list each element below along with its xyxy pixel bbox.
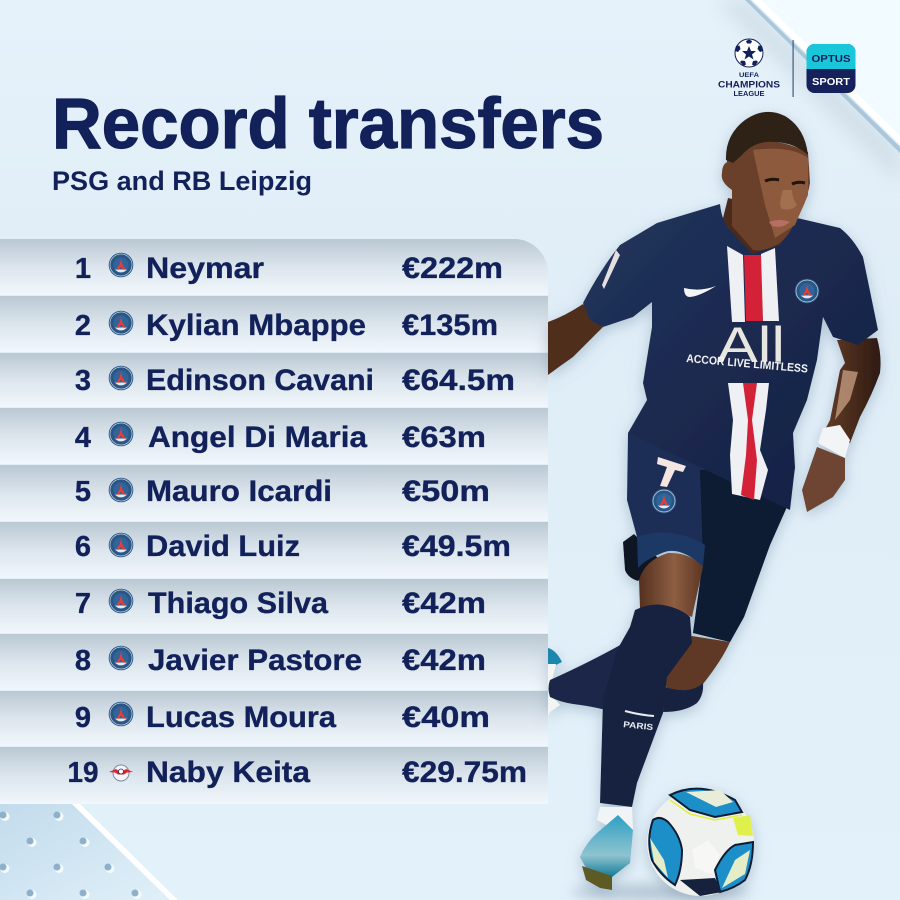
row 3: Edinson Cavani: €64.5m: [402, 364, 515, 397]
logo: UEFA Champions League: UEFA: [739, 72, 759, 79]
row 5: Mauro Icardi: €50m: [402, 475, 490, 508]
row 10: Naby Keita: 19: [68, 757, 98, 789]
sponsor line: ACCOR LIVE LIMITLESS: [686, 353, 809, 376]
forearm highlight: [835, 370, 858, 420]
row 1: Neymar: €222m: [402, 252, 503, 285]
row 3: Edinson Cavani: Edinson Cavani: [146, 364, 374, 397]
row 4: Angel Di Maria: [0, 408, 548, 464]
row 3: Edinson Cavani: 3: [75, 365, 91, 397]
head: [722, 112, 810, 250]
row 1: Neymar: 1: [75, 253, 91, 285]
front thigh: [639, 553, 703, 617]
shirt number: [657, 457, 686, 487]
football: [647, 789, 754, 896]
jersey: [583, 204, 878, 513]
row 1: Neymar: [0, 239, 548, 295]
left arm: [548, 304, 603, 375]
transfer table: [0, 239, 548, 804]
icon: RB Leipzig badge: [109, 765, 133, 781]
back leg and boot: [548, 644, 622, 716]
title: Record transfers: [52, 85, 604, 164]
row 8: Javier Pastore: Javier Pastore: [148, 644, 362, 677]
back thigh: [664, 636, 730, 694]
logo: UEFA Champions League: CHAMPIONS: [718, 80, 780, 90]
player illustration: [548, 112, 881, 896]
top-right corner panel: [715, 0, 900, 183]
row 2: Kylian Mbappe: 2: [75, 310, 91, 342]
row 9: Lucas Moura: [0, 691, 548, 746]
shorts: [623, 433, 795, 642]
row 5: Mauro Icardi: Mauro Icardi: [146, 475, 332, 508]
row 2: Kylian Mbappe: Kylian Mbappe: [146, 309, 366, 342]
row 10: Naby Keita: €29.75m: [402, 756, 527, 789]
ground shadow: [570, 884, 750, 900]
row 4: Angel Di Maria: 4: [75, 422, 91, 454]
row 8: Javier Pastore: €42m: [402, 644, 486, 677]
wrist bandage: [818, 425, 850, 458]
row 7: Thiago Silva: €42m: [402, 587, 486, 620]
logo divider: [792, 40, 794, 97]
row 4: Angel Di Maria: Angel Di Maria: [148, 421, 367, 454]
row 10: Naby Keita: Naby Keita: [146, 756, 310, 789]
row 10: Naby Keita: [0, 747, 548, 804]
row 2: Kylian Mbappe: €135m: [402, 309, 498, 342]
row 6: David Luiz: €49.5m: [402, 530, 511, 563]
row 7: Thiago Silva: 7: [75, 588, 91, 620]
row 6: David Luiz: David Luiz: [146, 530, 300, 563]
logo: UEFA Champions League: LEAGUE: [734, 89, 764, 98]
logo: UEFA Champions League: [718, 39, 780, 98]
logo: Optus Sport: [806, 44, 856, 93]
row 8: Javier Pastore: [0, 634, 548, 690]
subtitle: PSG and RB Leipzig: [52, 166, 312, 196]
logo: Optus Sport: SPORT: [812, 76, 851, 88]
front boot: [580, 807, 633, 890]
row 6: David Luiz: 6: [75, 531, 91, 563]
row 4: Angel Di Maria: €63m: [402, 421, 486, 454]
sponsor mark: All: [717, 317, 785, 373]
row 9: Lucas Moura: 9: [75, 702, 91, 734]
row 9: Lucas Moura: €40m: [402, 701, 490, 734]
row 1: Neymar: Neymar: [146, 252, 264, 285]
front sock: PARIS: [623, 719, 654, 732]
logo: Optus Sport: OPTUS: [812, 53, 850, 65]
hand: [802, 447, 845, 512]
row 7: Thiago Silva: [0, 579, 548, 633]
row 6: David Luiz: [0, 522, 548, 578]
row 8: Javier Pastore: 8: [75, 645, 91, 677]
row 2: Kylian Mbappe: [0, 296, 548, 352]
row 5: Mauro Icardi: [0, 465, 548, 521]
back knee sock: [663, 683, 703, 712]
row 9: Lucas Moura: Lucas Moura: [146, 701, 336, 734]
row 7: Thiago Silva: Thiago Silva: [148, 587, 328, 620]
row 3: Edinson Cavani: [0, 353, 548, 407]
neck: [722, 198, 790, 258]
front sock: [600, 605, 692, 807]
row 5: Mauro Icardi: 5: [75, 476, 91, 508]
right arm: [818, 338, 881, 443]
bottom-left dotted panel: [0, 804, 178, 900]
